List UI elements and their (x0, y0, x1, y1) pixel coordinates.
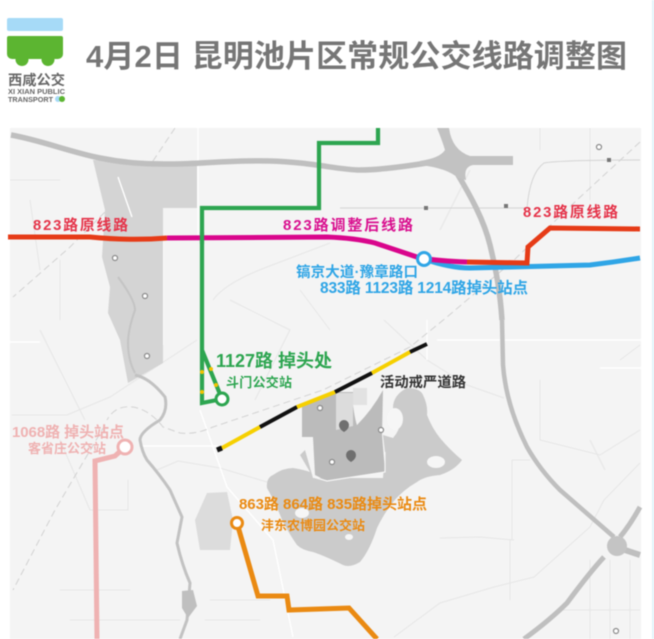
islands (295, 408, 445, 540)
traffic markers (200, 367, 218, 394)
route: red 823 west (8, 237, 167, 239)
roundabout south (607, 536, 627, 556)
farm park area (195, 492, 233, 550)
route: blue 833 1123 1214 (424, 258, 640, 268)
roundabout north (420, 128, 513, 180)
label: 1068 turnaround: 1068路 掉头站点 (12, 423, 124, 441)
label: Gaojing road turnaround: 镐京大道·豫章路口 (296, 263, 418, 281)
label: 863 864 835 turnaround: 863路 864路 835路掉头站点 (239, 495, 427, 513)
label: restricted road: 活动戒严道路 (380, 373, 467, 391)
route: orange 863 864 835 (237, 523, 377, 639)
label: 823 adjusted: 823路调整后线路 (283, 216, 413, 234)
route: pink 1068 (95, 447, 125, 639)
river and wetland (93, 160, 197, 383)
logo: Xi Xian Public Transport (7, 18, 65, 104)
label: Fengdong agri park station: 沣东农博园公交站 (261, 518, 365, 533)
label: Keshengzhuang station: 客省庄公交站 (28, 441, 106, 456)
white roads (10, 128, 641, 637)
route: red 823 east (467, 228, 640, 263)
small pond (182, 590, 197, 618)
map pins (339, 420, 356, 462)
green line crossing (200, 232, 204, 244)
label: 1127 turnaround: 1127路 掉头处 (216, 351, 332, 371)
park buildings (336, 393, 353, 430)
lake park (302, 390, 385, 481)
dashed railway (13, 128, 640, 590)
park shore (313, 452, 385, 481)
restricted road (217, 344, 427, 450)
station markers (118, 252, 430, 528)
label: Doumen station: 斗门公交站 (226, 375, 292, 390)
title: 4月2日 昆明池片区常规公交线路调整图 (86, 39, 627, 74)
page edge (652, 0, 654, 639)
Kunming Lake (267, 388, 462, 566)
grey expressways (11, 135, 640, 639)
label: 823 original east: 823路原线路 (523, 203, 618, 221)
logo: Xi Xian Public Transport: XI XIAN PUBLIC (8, 89, 65, 96)
label: 833 1123 1214 turnaround: 833路 1123路 1214路掉头站点 (320, 278, 528, 297)
logo: Xi Xian Public Transport: 西咸公交 (8, 72, 65, 88)
route: magenta 823 adjusted (167, 237, 467, 262)
route: green 1127 (202, 128, 378, 403)
minor roads (10, 128, 640, 639)
map background (10, 128, 641, 639)
logo: Xi Xian Public Transport: TRANSPORT (8, 97, 54, 104)
label: 823 original west: 823路原线路 (33, 216, 128, 234)
thin grey road and bus stops (340, 160, 640, 208)
map panel (8, 128, 641, 639)
